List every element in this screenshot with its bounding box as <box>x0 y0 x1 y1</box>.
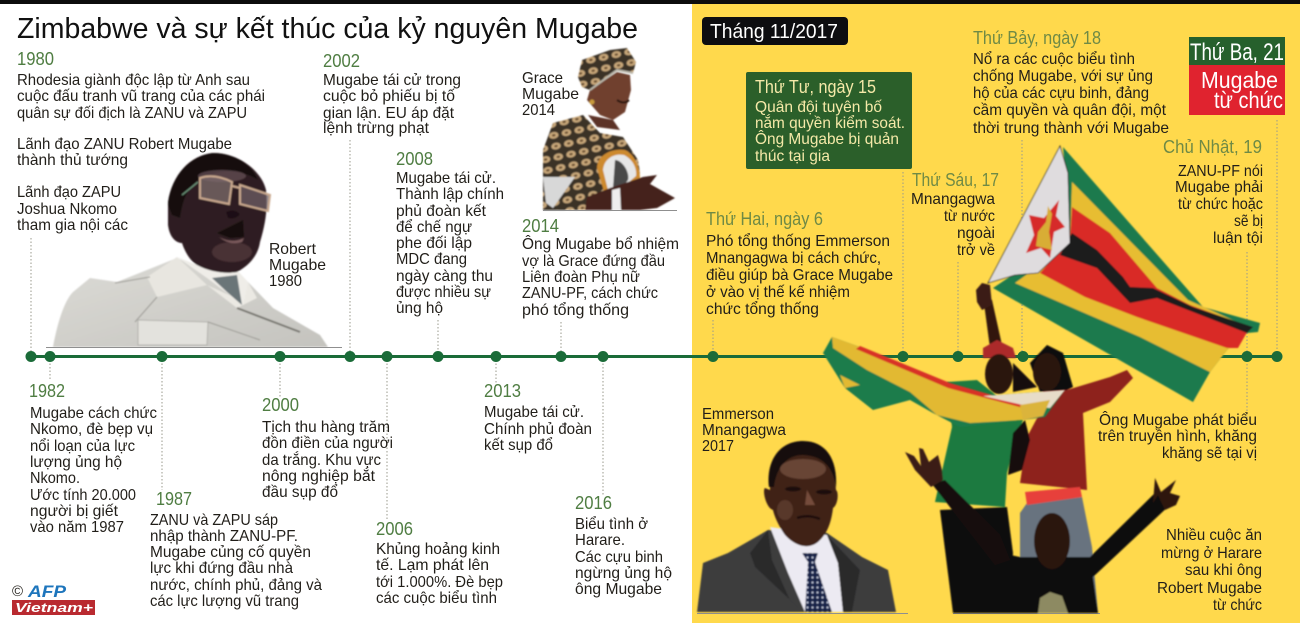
event 1987 <box>150 489 322 610</box>
dotted leader lines <box>31 120 1277 520</box>
event 1982: người bị giết <box>30 503 119 520</box>
event 1987: 1987 <box>156 489 192 509</box>
callout: Tuesday 21 Mugabe resigns <box>1189 37 1285 115</box>
event 2008: 2008 <box>396 149 433 169</box>
event 1987: nước, chính phủ, đảng và <box>150 577 322 594</box>
event 2008: MDC đang <box>396 251 467 268</box>
top black bar <box>0 0 1300 4</box>
event Sunday 19: ZANU-PF nói <box>1178 163 1263 180</box>
event 2014: phó tổng thống <box>522 301 629 319</box>
event 1980: Rhodesia giành độc lập từ Anh sau <box>17 72 250 89</box>
event 2008: ngày càng thu <box>396 268 493 285</box>
event 2000: đầu sụp đổ <box>262 483 338 501</box>
event 2006: 2006 <box>376 519 413 539</box>
logo: AFP Vietnam+: © <box>12 583 23 600</box>
event Friday 17: ngoài <box>957 225 995 242</box>
event 2014: vợ là Grace đứng đầu <box>522 253 665 270</box>
event 2002: 2002 <box>323 51 360 71</box>
event 2013: Mugabe tái cử. <box>484 404 584 421</box>
caption: Emmerson Mnangagwa 2017 <box>702 406 786 455</box>
event 1982: lượng ủng hộ <box>30 454 122 471</box>
event 1982: vào năm 1987 <box>30 519 124 536</box>
event Friday 17 <box>911 170 999 259</box>
event 1982: nổi loạn của lực <box>30 437 135 455</box>
event 2016: Biểu tình ở <box>575 515 648 533</box>
event Monday 6 <box>706 209 893 318</box>
caption: Grace Mugabe 2014: Mugabe <box>522 86 579 103</box>
event 2006: tới 1.000%. Đè bẹp <box>376 574 503 591</box>
event 2008: ủng hộ <box>396 300 443 317</box>
callout: Tuesday 21 Mugabe resigns: từ chức <box>1214 87 1283 113</box>
caption: Robert Mugabe 1980 <box>269 241 326 290</box>
event 2013: 2013 <box>484 381 521 401</box>
event 1980: quân sự đối địch là ZANU và ZAPU <box>17 105 247 122</box>
event 2000: nông nghiệp bắt <box>262 466 376 485</box>
event 1982: Nkomo. <box>30 470 80 487</box>
title: Zimbabwe và sự kết thúc của kỷ nguyên Mugabe <box>17 13 638 45</box>
event Saturday 18 <box>973 28 1169 137</box>
caption: Emmerson Mnangagwa 2017: Emmerson <box>702 406 774 423</box>
caption: Robert Mugabe 1980: Mugabe <box>269 257 326 274</box>
event 1982: 1982 <box>29 381 65 401</box>
event Monday 6: Phó tổng thống Emmerson <box>706 232 890 250</box>
event 2008: phủ đoàn kết <box>396 203 487 220</box>
callout: Wednesday 15 <box>746 72 912 169</box>
event 2014 <box>522 216 679 319</box>
text: Mugabe TV speech: khăng sẽ tại vị <box>1162 445 1257 462</box>
event Saturday 18: chống Mugabe, với sự ủng <box>973 68 1153 85</box>
event 1982 <box>29 381 157 536</box>
event 2008 <box>396 149 504 317</box>
event 1982: Mugabe cách chức <box>30 405 157 422</box>
event 2013: Chính phủ đoàn <box>484 421 592 438</box>
event 1987: các lực lượng vũ trang <box>150 593 299 610</box>
event 1987: Mugabe củng cố quyền <box>150 544 311 561</box>
caption: Grace Mugabe 2014: Grace <box>522 70 563 87</box>
event 2002: gian lận. EU áp đặt <box>323 105 455 122</box>
event Monday 6: chức tổng thống <box>706 300 819 318</box>
event 2006 <box>376 519 503 607</box>
event Saturday 18: cầm quyền và quân đội, một <box>973 102 1167 119</box>
event 2000: đồn điền của người <box>262 435 393 452</box>
logo: AFP Vietnam+ <box>12 582 95 615</box>
callout: Wednesday 15: nắm quyền kiểm soát. <box>755 113 905 132</box>
event 2000: 2000 <box>262 395 299 415</box>
event Friday 17: trở về <box>957 242 995 259</box>
event 2006: tế. Lạm phát lên <box>376 557 489 574</box>
text: celebrations in Harare: sau khi ông <box>1185 562 1262 579</box>
event 2016: Các cựu binh <box>575 549 663 566</box>
panel: November 2017 yellow background <box>692 0 1300 623</box>
month label: Tháng 11/2017: Tháng 11/2017 <box>710 21 838 43</box>
event 2013 <box>484 381 592 454</box>
event 1982: Nkomo, đè bẹp vụ <box>30 421 153 438</box>
caption: Grace Mugabe 2014 <box>522 70 579 119</box>
event 2016: ông Mugabe <box>575 581 662 598</box>
photo: waving flag scarf <box>823 337 1065 427</box>
caption: Robert Mugabe 1980: Robert <box>269 241 317 258</box>
caption: Grace Mugabe 2014: 2014 <box>522 102 555 119</box>
event Friday 17: Thứ Sáu, 17 <box>912 170 999 190</box>
callout: Wednesday 15: Ông Mugabe bị quản <box>755 129 899 148</box>
event 2016: ngừng ủng hộ <box>575 565 672 582</box>
event 2016: Harare. <box>575 532 625 549</box>
text: Mugabe TV speech <box>1098 410 1257 462</box>
photo: large Zimbabwe flag <box>988 146 1260 402</box>
event 1987: lực khi đứng đầu nhà <box>150 560 293 577</box>
event Monday 6: điều giúp bà Grace Mugabe <box>706 267 893 284</box>
event 1980: Lãnh đạo ZAPU <box>17 184 121 201</box>
text: Mugabe TV speech: Ông Mugabe phát biểu <box>1099 410 1257 429</box>
event Monday 6: Mnangagwa bị cách chức, <box>706 250 881 267</box>
event Friday 17: Mnangagwa <box>911 191 995 208</box>
event 1980 <box>17 49 265 234</box>
photo: Robert Mugabe 1980 <box>53 153 328 347</box>
logo: AFP Vietnam+: Vietnam+ <box>15 600 94 615</box>
timeline axis with date markers <box>26 351 1282 362</box>
caption: Emmerson Mnangagwa 2017: 2017 <box>702 438 734 455</box>
event Sunday 19: Mugabe phải <box>1175 179 1263 196</box>
event Monday 6: ở vào vị thế kế nhiệm <box>706 284 850 301</box>
event 2008: phe đối lập <box>396 235 472 252</box>
event 2000: Tịch thu hàng trăm <box>262 419 390 436</box>
event 2016: 2016 <box>575 493 612 513</box>
event 1980: cuộc đấu tranh vũ trang của các phái <box>17 88 265 105</box>
event 2016 <box>575 493 672 598</box>
event Sunday 19 <box>1163 137 1263 247</box>
event Monday 6: Thứ Hai, ngày 6 <box>706 209 823 229</box>
event 2014: 2014 <box>522 216 559 236</box>
event Sunday 19: sẽ bị <box>1234 213 1263 230</box>
event 2014: Ông Mugabe bổ nhiệm <box>522 234 679 253</box>
event 2008: để chế ngự <box>396 218 472 236</box>
event Saturday 18: hộ của các cựu binh, đảng <box>973 85 1149 102</box>
event 2000: da trắng. Khu vực <box>262 450 381 469</box>
event 2014: ZANU-PF, cách chức <box>522 285 658 302</box>
event Saturday 18: Nổ ra các cuộc biểu tình <box>973 50 1135 68</box>
event 1982: Ước tính 20.000 <box>30 487 136 504</box>
text: celebrations in Harare: Nhiều cuộc ăn <box>1166 527 1262 544</box>
caption: Emmerson Mnangagwa 2017: Mnangagwa <box>702 422 786 439</box>
text: celebrations in Harare <box>1157 527 1262 614</box>
event Saturday 18: Thứ Bảy, ngày 18 <box>973 28 1101 48</box>
photo baselines <box>46 210 1100 614</box>
event 2008: được nhiều sự <box>396 284 491 301</box>
callout: Wednesday 15: Quân đội tuyên bố <box>755 99 882 116</box>
photo: celebrating people <box>905 283 1180 613</box>
callout: Tuesday 21 Mugabe resigns: Mugabe <box>1201 67 1278 93</box>
event 2008: Mugabe tái cử. <box>396 170 496 187</box>
event 1980: 1980 <box>17 49 54 69</box>
event 2014: Liên đoàn Phụ nữ <box>522 269 640 286</box>
event 1980: tham gia nội các <box>17 217 128 234</box>
caption: Robert Mugabe 1980: 1980 <box>269 273 302 290</box>
callout: Wednesday 15: thúc tại gia <box>755 148 830 165</box>
callout: Wednesday 15: Thứ Tư, ngày 15 <box>755 77 876 97</box>
text: celebrations in Harare: Robert Mugabe <box>1157 580 1262 597</box>
event Sunday 19: luận tội <box>1213 230 1263 247</box>
text: celebrations in Harare: mừng ở Harare <box>1161 545 1262 562</box>
event 2006: các cuộc biểu tình <box>376 589 497 607</box>
event 1987: ZANU và ZAPU sáp <box>150 512 278 529</box>
event 2002: cuộc bỏ phiếu bị tố <box>323 88 455 105</box>
event 2002: Mugabe tái cử trong <box>323 72 461 89</box>
event 2008: Thành lập chính <box>396 186 504 203</box>
event Sunday 19: từ chức hoặc <box>1178 196 1263 213</box>
event 2013: kết sụp đổ <box>484 436 553 454</box>
event 2006: Khủng hoảng kinh <box>376 541 500 558</box>
event 1987: nhập thành ZANU-PF. <box>150 528 298 545</box>
text: Mugabe TV speech: trên truyền hình, khăng <box>1098 428 1257 445</box>
photo: Grace Mugabe 2014 <box>543 48 675 210</box>
text: celebrations in Harare: từ chức <box>1213 597 1262 614</box>
event Sunday 19: Chủ Nhật, 19 <box>1163 137 1262 157</box>
photo: Emmerson Mnangagwa <box>697 441 896 612</box>
event Friday 17: từ nước <box>944 208 995 225</box>
logo: AFP Vietnam+: AFP <box>27 582 67 601</box>
event Saturday 18: thời trung thành với Mugabe <box>973 120 1169 137</box>
event 2000 <box>262 395 393 501</box>
event 1980: thành thủ tướng <box>17 152 128 169</box>
event 2002: lệnh trừng phạt <box>323 120 430 137</box>
event 2002 <box>323 51 461 137</box>
event 1980: Joshua Nkomo <box>17 201 117 218</box>
event 1980: Lãnh đạo ZANU Robert Mugabe <box>17 136 232 153</box>
